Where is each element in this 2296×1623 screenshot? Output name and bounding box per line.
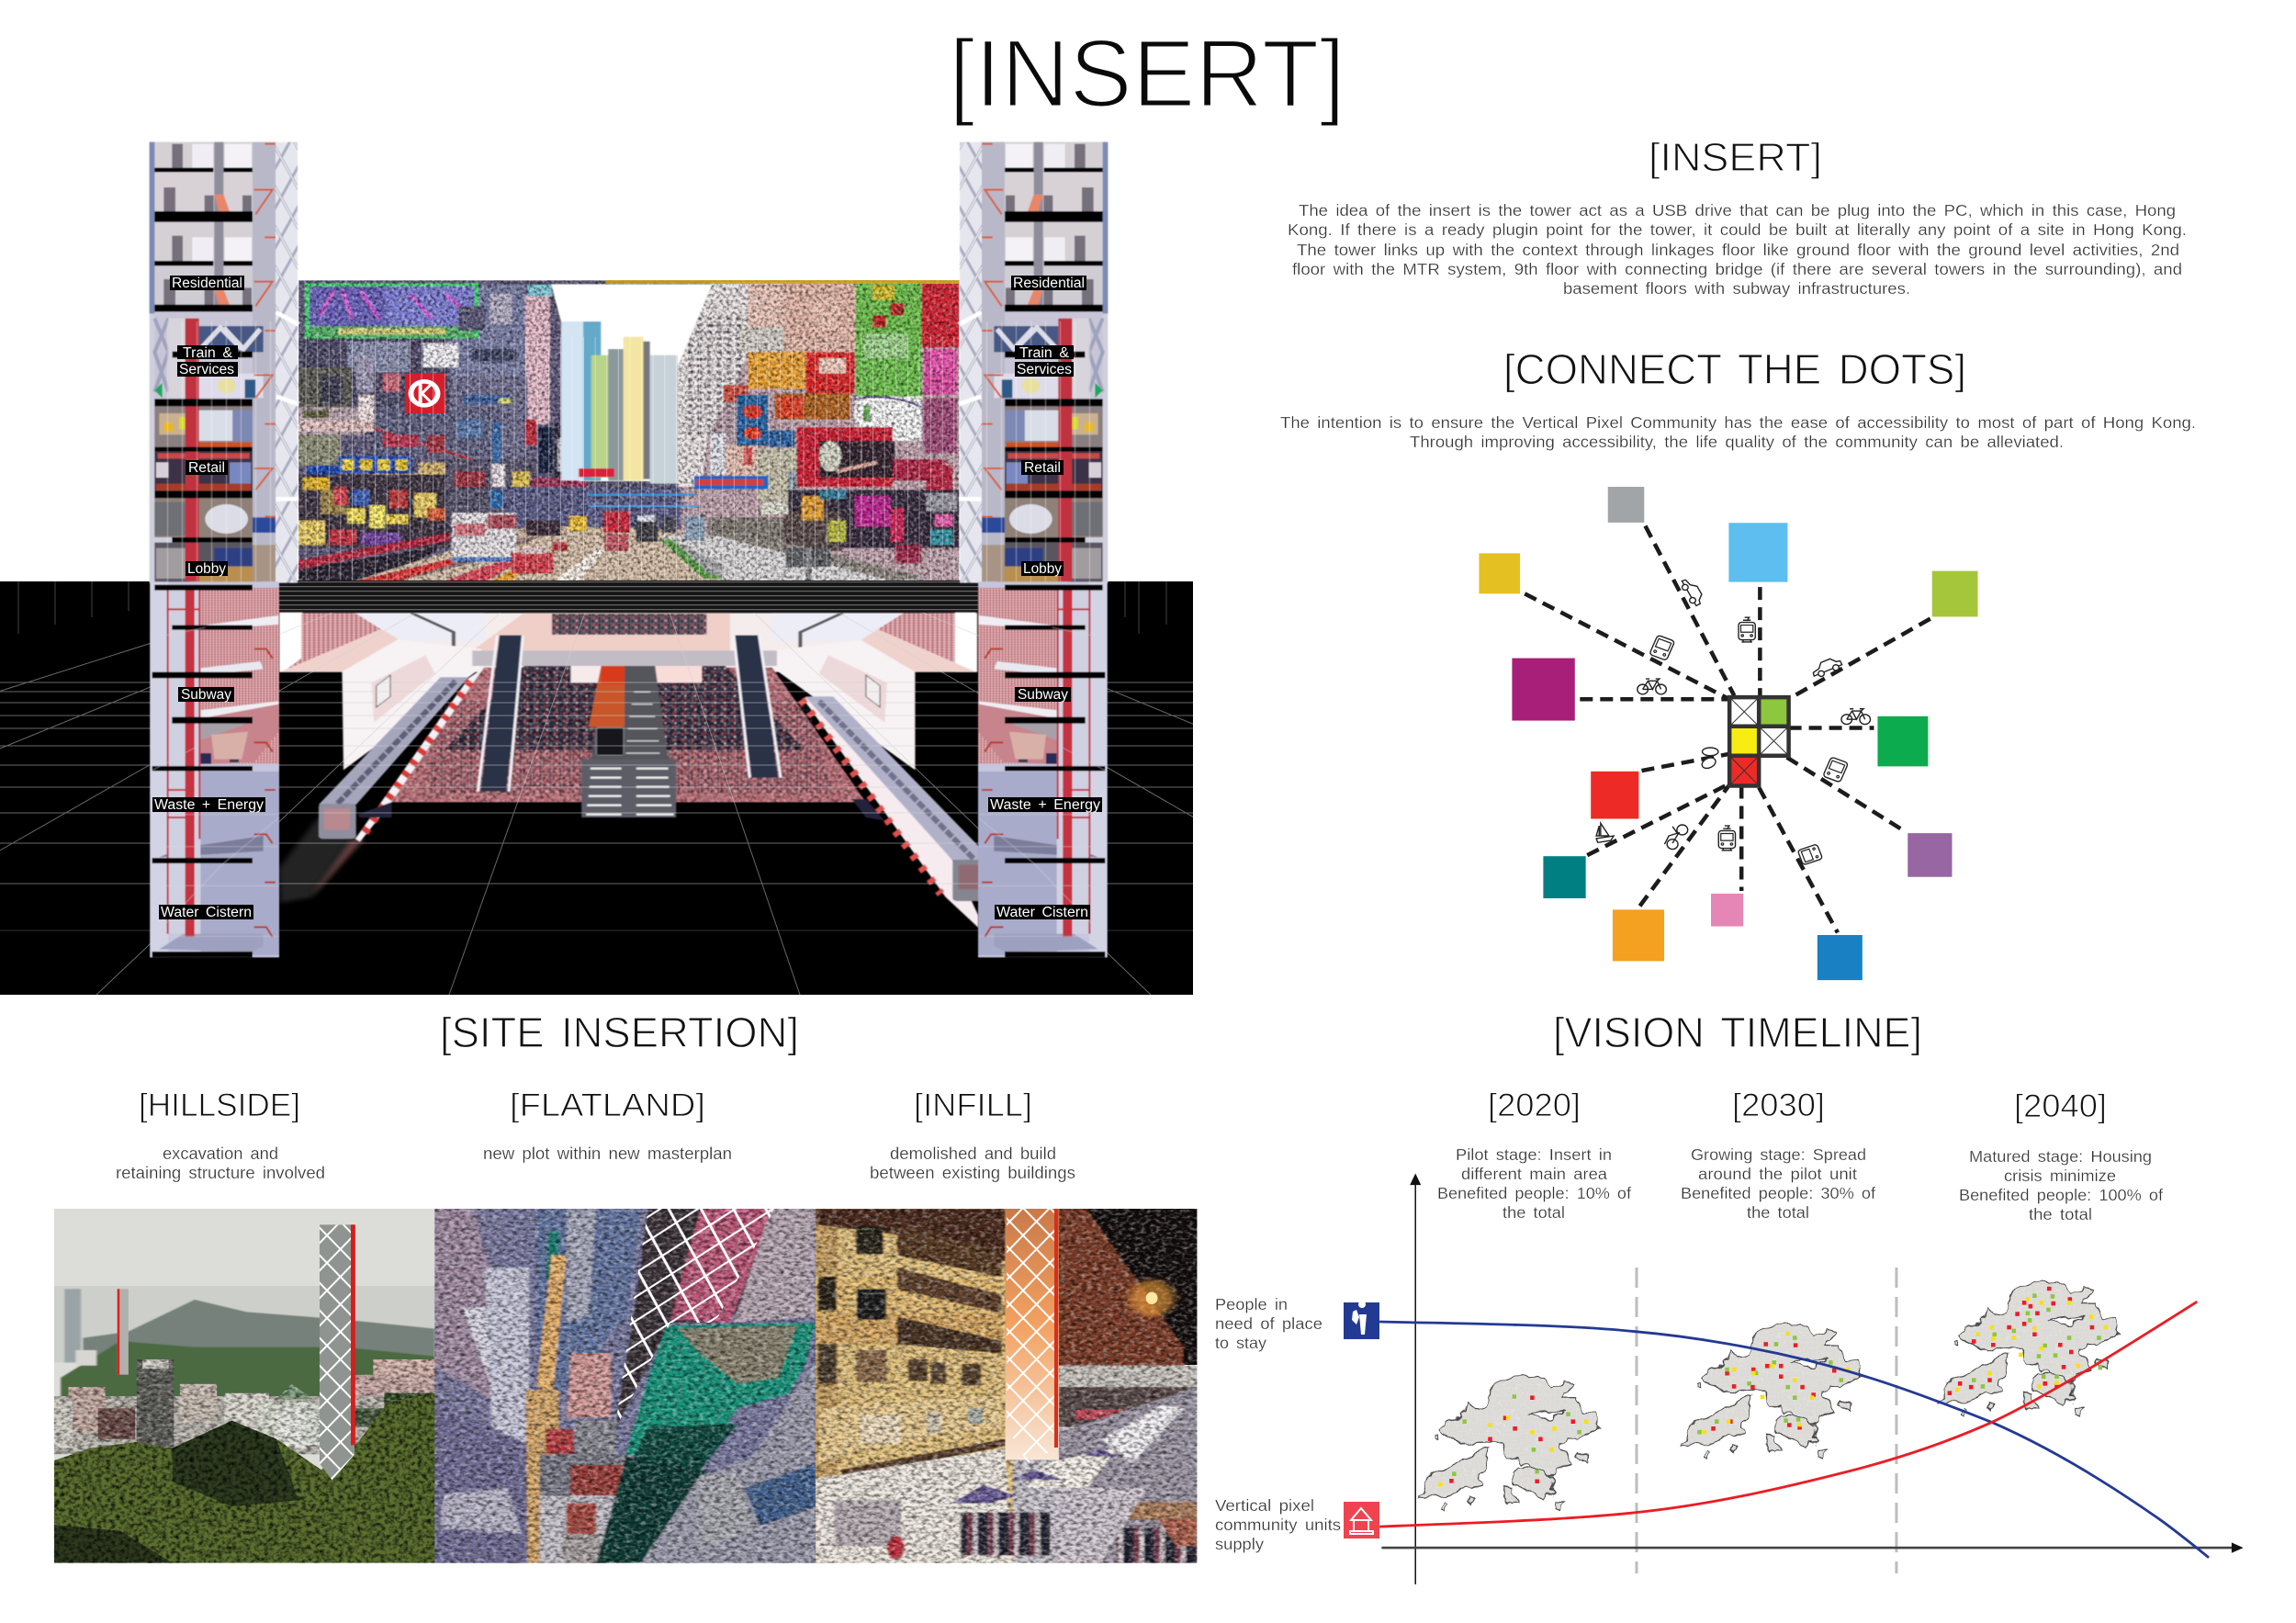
dashed connection lines xyxy=(1525,526,1930,932)
column: infill: demolished and build xyxy=(890,1144,1056,1163)
tower labels: right: Residential xyxy=(1013,276,1085,291)
year column: 2030: Growing stage: Spread xyxy=(1691,1145,1866,1164)
year column: 2020 xyxy=(1437,1088,1631,1222)
text block: connect the dots xyxy=(1280,413,2196,451)
year column: 2040: the total xyxy=(2029,1205,2092,1223)
column: hillside: excavation and xyxy=(163,1144,278,1163)
tower labels: right: Water Cistern xyxy=(996,905,1088,920)
curve: community units supply xyxy=(1379,1302,2197,1527)
chart label: people in need: People in xyxy=(1215,1295,1288,1313)
icon: car 2 xyxy=(1810,656,1843,679)
circle K sign xyxy=(405,374,445,413)
dots: 2030 xyxy=(1697,1332,1851,1434)
year column: 2020: different main area xyxy=(1461,1165,1607,1183)
chart label: people in need: to stay xyxy=(1215,1334,1266,1352)
map: Hong Kong 2030 xyxy=(1684,1324,1862,1461)
icon: bus 2 xyxy=(1823,757,1849,783)
column: hillside xyxy=(116,1088,325,1182)
year column: 2040 xyxy=(1959,1088,2163,1223)
panel: section drawing xyxy=(0,142,1851,995)
heading: site insertion: [SITE INSERTION] xyxy=(440,1009,799,1056)
year column: 2030: the total xyxy=(1747,1203,1809,1222)
ground wall grid xyxy=(18,581,1166,634)
icon: person with bundle xyxy=(1344,1301,1379,1339)
curve: people in need xyxy=(1379,1322,2209,1558)
black ground plane xyxy=(0,581,1193,995)
heading: connect the dots: [CONNECT THE DOTS] xyxy=(1503,345,1966,393)
axes xyxy=(1381,1173,2244,1584)
left tower lower xyxy=(150,581,279,957)
icon: sailboat xyxy=(1596,823,1614,842)
text block: insert: basement floors with subway infrastructures. xyxy=(1563,279,1910,298)
column: hillside: retaining structure involved xyxy=(116,1163,325,1182)
column: infill: [INFILL] xyxy=(914,1088,1032,1123)
chart label: community units: community units xyxy=(1215,1516,1341,1534)
chart label: community units: supply xyxy=(1215,1535,1264,1553)
chart label: people in need: need of place xyxy=(1215,1314,1322,1333)
heading: insert: [INSERT] xyxy=(1649,135,1822,180)
text block: insert: floor with the MTR system, 9th floor with connecting bridge (if there are several towers in the surrounding), and xyxy=(1292,260,2182,278)
central hub xyxy=(1729,697,1789,785)
column: infill: between existing buildings xyxy=(870,1163,1075,1182)
icon: car 1 xyxy=(1679,576,1705,607)
tower labels: left: Water Cistern xyxy=(161,905,252,920)
vision timeline chart xyxy=(1379,1173,2244,1584)
map: Hong Kong 2040 xyxy=(1941,1281,2119,1419)
year column: 2030: [2030] xyxy=(1732,1088,1825,1123)
year column: 2020: [2020] xyxy=(1488,1088,1581,1123)
tower labels: left: Subway xyxy=(181,687,231,703)
year column: 2040: Benefited people: 100% of xyxy=(1959,1186,2163,1204)
column: flatland: [FLATLAND] xyxy=(510,1088,705,1123)
chart label: community units xyxy=(1215,1496,1341,1553)
year column: 2040: [2040] xyxy=(2014,1088,2107,1124)
tower labels: right xyxy=(988,276,1102,920)
text block: insert xyxy=(1288,201,2187,298)
subway station xyxy=(278,613,993,928)
map: Hong Kong 2020 xyxy=(1422,1376,1599,1514)
icon: bicycle 1 xyxy=(1638,679,1666,694)
tower labels: right: Services xyxy=(1017,362,1072,378)
photo: hillside xyxy=(54,1209,434,1563)
chart label: community units: Vertical pixel xyxy=(1215,1496,1314,1515)
icon: tram 1 xyxy=(1739,617,1755,642)
year column: 2020: the total xyxy=(1503,1203,1565,1222)
perspective grid xyxy=(0,613,1193,995)
icon: motorcycle xyxy=(1664,825,1688,850)
icon: house xyxy=(1344,1502,1379,1538)
year column: 2030: Benefited people: 30% of xyxy=(1681,1184,1875,1202)
text block: insert: The idea of the insert is the tower act as a USB drive that can be plug into the PC, which in this case, Hong xyxy=(1299,201,2176,220)
icon: footprints xyxy=(1700,748,1718,771)
dots: 2020 xyxy=(1438,1394,1588,1486)
photo: infill xyxy=(816,1209,1197,1563)
column: flatland: new plot within new masterplan xyxy=(483,1144,732,1163)
text block: insert: Kong. If there is a ready plugin point for the tower, it could be built at literally any point of a site in Hong Kong. xyxy=(1288,220,2187,239)
column: hillside: [HILLSIDE] xyxy=(139,1088,300,1123)
hub and spoke diagram xyxy=(1479,487,1978,980)
icon: bus 1 xyxy=(1649,635,1675,660)
heading: vision timeline: [VISION TIMELINE] xyxy=(1553,1009,1922,1056)
column: flatland xyxy=(483,1088,732,1163)
tower labels: left xyxy=(152,276,265,920)
right tower xyxy=(959,142,1108,957)
text block: connect the dots: The intention is to ensure the Vertical Pixel Community has the ease of accessibility to most of part of Hong Kong. xyxy=(1280,413,2196,432)
outer squares xyxy=(1479,487,1978,980)
tower labels: left: Waste + Energy xyxy=(154,797,264,813)
year column: 2030: around the pilot unit xyxy=(1698,1165,1857,1183)
street scene photo xyxy=(298,280,962,581)
tower labels: left: Lobby xyxy=(187,561,226,577)
chart label: people in need xyxy=(1215,1295,1322,1352)
dark slab xyxy=(278,580,978,613)
tower labels: left: Train & xyxy=(183,345,233,361)
photo strip xyxy=(54,1209,1197,1563)
year column: 2020: Pilot stage: Insert in xyxy=(1456,1145,1612,1164)
tower labels: left: Services xyxy=(179,362,234,378)
year column: 2040: Matured stage: Housing xyxy=(1969,1147,2152,1166)
dashed period dividers xyxy=(1637,1268,1896,1573)
icon: bicycle 2 xyxy=(1841,709,1870,725)
tower labels: left: Residential xyxy=(172,276,242,291)
icon: bus 3 xyxy=(1797,844,1823,865)
column: infill xyxy=(870,1088,1075,1182)
tower labels: left: Retail xyxy=(188,460,225,476)
left tower upper xyxy=(150,142,298,591)
title: [INSERT] xyxy=(949,20,1345,128)
dots: 2040 xyxy=(1948,1287,2108,1395)
tower labels: right: Waste + Energy xyxy=(990,797,1100,813)
year column: 2030 xyxy=(1681,1088,1875,1222)
sky and distant towers xyxy=(551,284,768,507)
icon: tram 2 xyxy=(1718,826,1736,851)
photo: flatland xyxy=(434,1209,816,1563)
text block: insert: The tower links up with the context through linkages floor like ground floor with the ground level activities, 2nd xyxy=(1297,241,2179,259)
year column: 2020: Benefited people: 10% of xyxy=(1437,1184,1631,1202)
tower labels: right: Lobby xyxy=(1023,561,1062,577)
text block: connect the dots: Through improving accessibility, the life quality of the community can be alleviated. xyxy=(1410,433,2064,451)
year column: 2040: crisis minimize xyxy=(2004,1167,2116,1185)
tower labels: right: Train & xyxy=(1019,345,1070,361)
tower labels: right: Retail xyxy=(1024,460,1061,476)
tower labels: right: Subway xyxy=(1018,687,1068,703)
